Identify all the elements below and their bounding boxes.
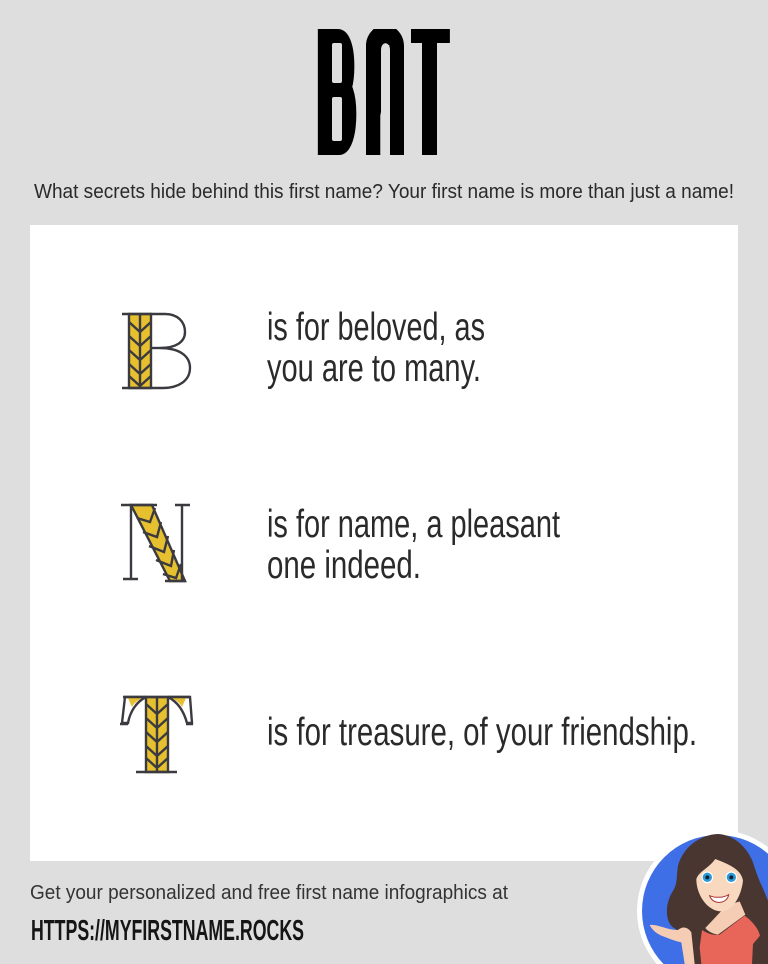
footer text: Get your personalized and free first name infographics at — [30, 882, 508, 904]
title: B — [318, 10, 355, 175]
title — [310, 8, 455, 175]
text: N line — [267, 503, 560, 587]
text: N line: is for name, a pleasant — [267, 503, 560, 546]
text: B line — [267, 306, 485, 390]
panel: letters — [30, 225, 738, 861]
text: B line: is for beloved, as — [267, 306, 485, 349]
icon: letter N — [121, 505, 190, 581]
icon: letter B — [122, 314, 190, 388]
text: N line: one indeed. — [267, 544, 421, 587]
text: B line: you are to many. — [267, 347, 481, 390]
avatar — [637, 830, 768, 964]
footer url: HTTPS://MYFIRSTNAME.ROCKS — [31, 915, 304, 947]
subtitle: What secrets hide behind this first name? Your first name is more than just a name! — [34, 181, 734, 203]
icon: letter T — [120, 697, 193, 772]
title: N — [366, 8, 404, 175]
title: T — [412, 8, 446, 175]
